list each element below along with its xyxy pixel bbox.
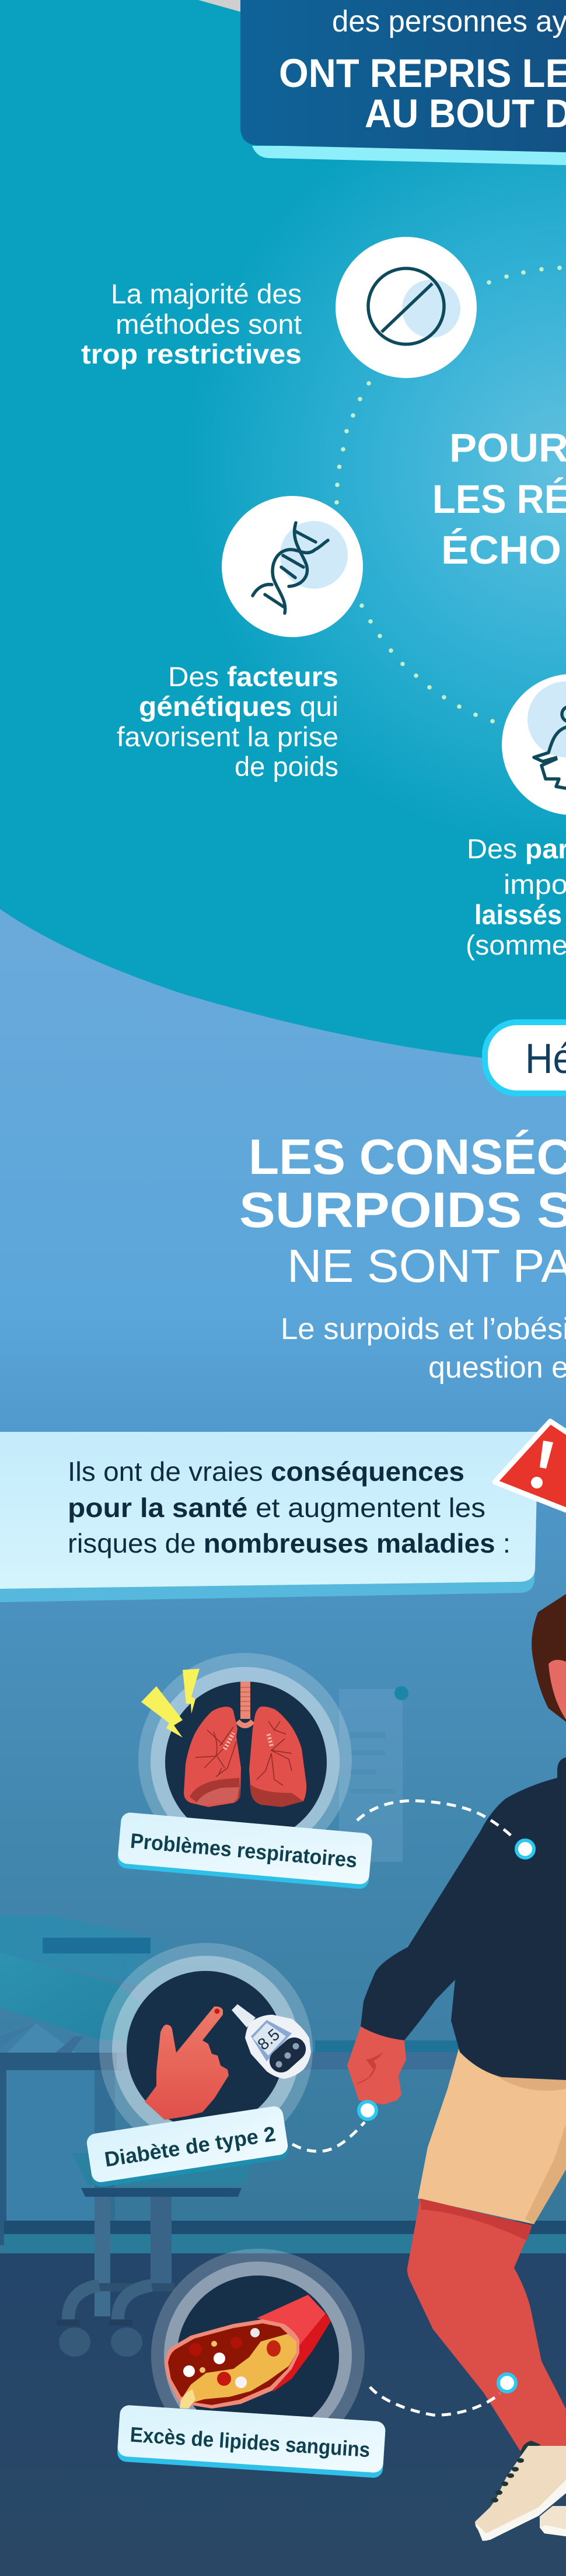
consequence: type 2 diabetes <box>86 1943 313 2188</box>
badge: Hélas <box>485 1022 566 1093</box>
text: psychological factors: Des par <box>467 833 566 864</box>
section title: why diets fail <box>432 425 566 572</box>
text: restrictive methods: trop restrictives <box>81 338 302 369</box>
text: genetic factors: favorisent la prise <box>117 721 338 752</box>
hospital room decor <box>0 1686 566 2357</box>
man: shoes <box>540 2506 566 2536</box>
grey triangle top <box>198 0 242 12</box>
label: respiratory problems <box>117 1812 373 1890</box>
connector: lipids to leg <box>370 2374 516 2415</box>
section title: why diets fail: ÉCHO <box>441 527 561 572</box>
statistic intro text: des personnes ay <box>332 5 566 39</box>
label: excess blood lipids: Excès de lipides sanguins <box>130 2423 371 2462</box>
text: restrictive methods <box>81 278 302 369</box>
man: hair and face <box>532 1594 566 1722</box>
callout: health consequences: risques de nombreuses maladies : <box>68 1528 511 1558</box>
text: genetic factors: de poids <box>235 751 338 782</box>
callout: health consequences: Ils ont de vraies conséquences <box>68 1456 464 1487</box>
callout: health consequences <box>0 1432 538 1602</box>
text: genetic factors: Des facteurs <box>168 661 338 692</box>
text: restrictive methods: méthodes sont <box>116 309 302 340</box>
text: subtitle: question e <box>428 1351 566 1385</box>
man: leg <box>407 2198 566 2451</box>
consequence: respiratory problems <box>117 1653 373 1890</box>
man illustration <box>347 1594 566 2541</box>
callout: health consequences: pour la santé et augmentent les <box>68 1493 485 1523</box>
text: genetic factors: génétiques qui <box>139 691 338 722</box>
background: hospital wall <box>0 875 566 2258</box>
text: psychological factors: (somme <box>466 929 566 960</box>
icon: restriction sign <box>336 237 477 378</box>
panel: statistic callout <box>240 0 566 165</box>
panel: teal section background <box>0 0 566 1067</box>
title: consequences: NE SONT PA <box>287 1240 566 1292</box>
connector: lungs to chest <box>357 1801 534 1858</box>
section title: why diets fail: POUR <box>449 425 566 470</box>
text: subtitle: Le surpoids et l’obési <box>281 1312 566 1346</box>
text: subtitle <box>281 1312 566 1385</box>
connector: diabetes to hand <box>292 2102 376 2151</box>
background: floor <box>0 2253 566 2576</box>
text: psychological factors: laissés <box>474 899 562 930</box>
label: type 2 diabetes: Diabète de type 2 <box>103 2121 277 2171</box>
label: excess blood lipids <box>117 2404 386 2479</box>
label: type 2 diabetes <box>86 2105 290 2188</box>
icon: meditation <box>502 674 566 815</box>
icon: lungs <box>138 1653 352 1867</box>
text: psychological factors <box>466 833 566 960</box>
title: consequences: LES CONSÉC <box>249 1130 566 1185</box>
text: genetic factors <box>117 661 338 782</box>
title: consequences: SURPOIDS S <box>239 1183 566 1238</box>
consequence: excess blood lipids <box>117 2249 386 2479</box>
man: sweater <box>361 1757 566 2080</box>
text: restrictive methods: La majorité des <box>111 278 302 309</box>
icon: warning triangle <box>495 1421 566 1512</box>
dotted connectors <box>334 265 562 723</box>
man: hand <box>347 2026 406 2105</box>
label: respiratory problems: Problèmes respiratoires <box>130 1829 358 1872</box>
icon: artery with plaque <box>151 2249 365 2462</box>
text: psychological factors: impo <box>504 869 566 900</box>
icon: blood glucose test <box>99 1943 313 2156</box>
man: shorts <box>418 2045 566 2224</box>
title: consequences <box>239 1130 566 1292</box>
icon: blood glucose test: 8.5 <box>254 2025 283 2054</box>
icon: DNA <box>222 496 363 637</box>
